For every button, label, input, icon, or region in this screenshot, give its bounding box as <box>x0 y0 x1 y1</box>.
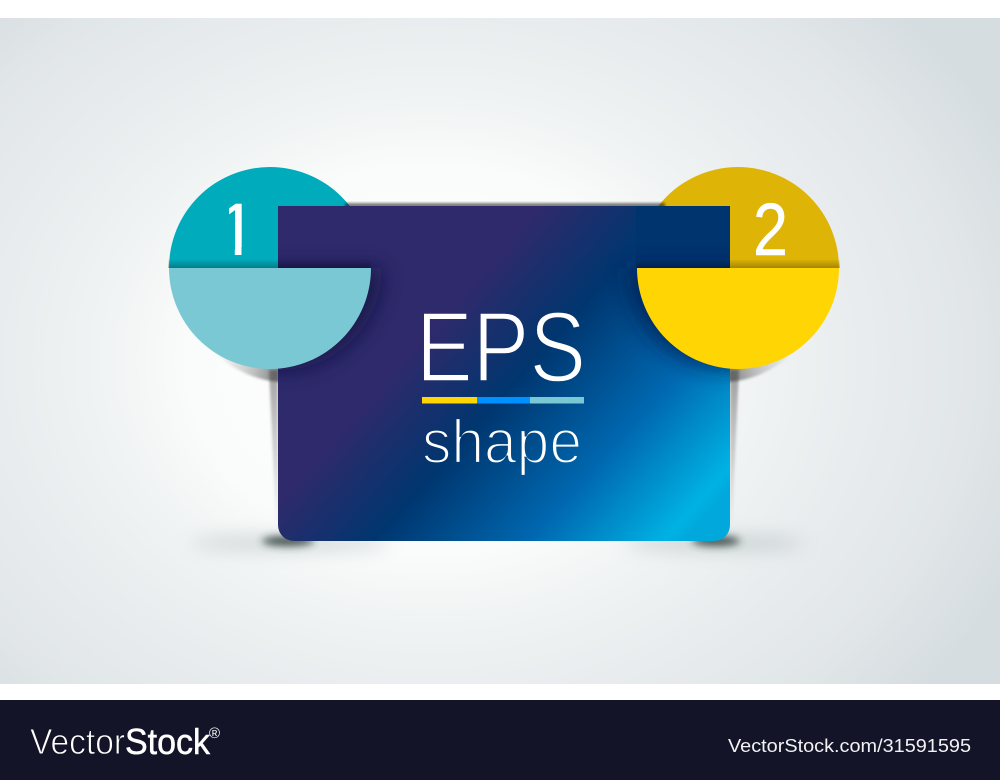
ground shadow: left <box>190 535 390 551</box>
circle 2 lower half <box>637 268 839 369</box>
footer logo: Vector <box>30 721 125 762</box>
circle 1 cast shadow <box>218 355 280 382</box>
circle 1 upper half <box>168 167 350 268</box>
card shadow <box>269 203 739 522</box>
main card <box>278 206 730 541</box>
footer bar <box>0 700 1000 780</box>
subtitle: shape: shape <box>422 408 582 477</box>
ground shadow: right <box>625 535 805 551</box>
card overlap panel <box>636 206 730 268</box>
circle 1 lower half <box>169 268 371 369</box>
circle 2 cast shadow <box>728 355 790 382</box>
number 1: 1 <box>216 188 258 271</box>
footer logo <box>30 721 220 762</box>
footer logo: Stock <box>125 721 211 762</box>
circle 2 upper half <box>658 167 840 268</box>
tricolour divider <box>422 397 584 404</box>
card shadows from circles <box>178 259 830 370</box>
number 2: 2 <box>753 188 788 271</box>
footer image id: VectorStock.com/31591595 <box>728 735 971 756</box>
title: EPS: EPS <box>416 292 586 404</box>
footer logo: ® <box>209 725 220 742</box>
